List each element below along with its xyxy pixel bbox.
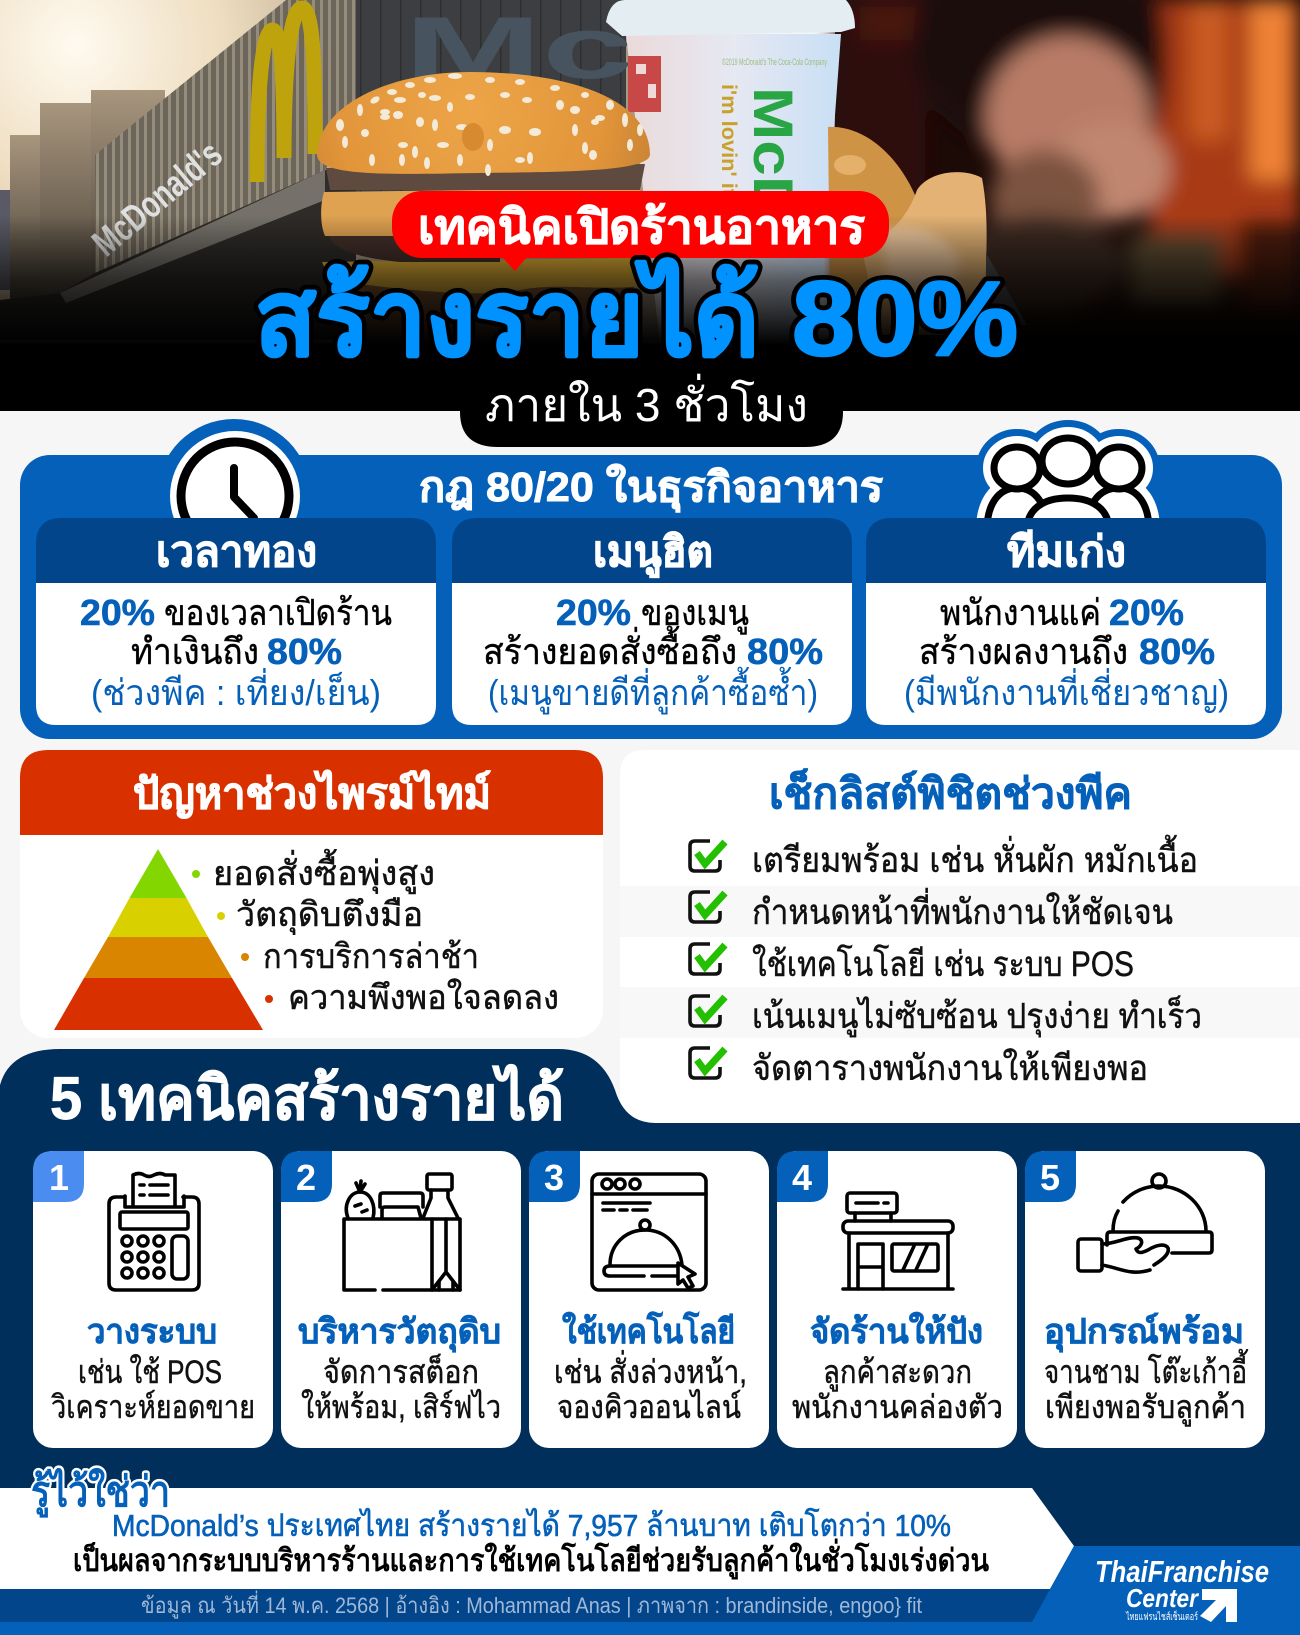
badge 1: 1 <box>49 1157 69 1198</box>
banner shape <box>0 1488 1074 1589</box>
check item 4: เน้นเมนูไม่ซับซ้อน ปรุงง่าย ทำเร็ว <box>752 995 1202 1037</box>
card: golden hours: ของเวลาเปิดร้าน <box>164 592 392 633</box>
photo: fried chicken <box>828 127 1027 335</box>
section: 5 techniques <box>0 1049 1300 1635</box>
card 3 text <box>554 1311 747 1425</box>
check item 1: เตรียมพร้อม เช่น หั่นผัก หมักเนื้อ <box>752 834 1198 880</box>
card 3 text: จองคิวออนไลน์ <box>557 1389 741 1425</box>
tagline bubble <box>392 191 889 271</box>
heading: ปัญหาช่วงไพรม์ไทม์ <box>133 769 491 819</box>
card: strong team: สร้างผลงานถึง <box>919 631 1128 672</box>
check item 5: จัดตารางพนักงานให้เพียงพอ <box>752 1048 1148 1088</box>
card 3 text: ใช้เทคโนโลยี <box>562 1311 735 1351</box>
card: golden hours <box>36 518 436 725</box>
card 5 text <box>1044 1312 1249 1427</box>
pyramid labels <box>192 849 559 1017</box>
main title: สร้างรายได้ <box>255 258 759 378</box>
hero dark fade <box>0 215 1300 345</box>
card: strong team: พนักงานแค่ <box>940 592 1101 633</box>
heading: เช็กลิสต์พิชิตช่วงพีค <box>769 768 1132 817</box>
card 2 text: จัดการสต็อก <box>323 1353 479 1390</box>
check item 3: ใช้เทคโนโลยี เช่น ระบบ POS <box>752 944 1134 984</box>
icon: serving cloche <box>1078 1174 1212 1272</box>
badge 3: 3 <box>544 1157 564 1198</box>
card: strong team <box>866 518 1266 725</box>
card: strong team: ทีมเก่ง <box>1007 528 1126 575</box>
main title <box>255 258 1018 378</box>
icon: clock <box>169 419 300 518</box>
card: hit menu: 80% <box>747 631 823 672</box>
badge 3 <box>529 1151 580 1202</box>
card: strong team: 80% <box>1139 631 1215 672</box>
pyramid chart <box>54 849 263 1030</box>
card 1 text: วิเคราะห์ยอดขาย <box>51 1389 255 1425</box>
logo: ThaiFranchise Center: ไทยแฟรนไชส์เซ็นเตอร์ <box>1125 1609 1198 1623</box>
photo: blurred woman <box>835 0 1300 345</box>
main title: 80% <box>792 260 1018 378</box>
card: strong team: (มีพนักงานที่เชี่ยวชาญ) <box>904 668 1229 713</box>
main title: 80% <box>792 260 1018 378</box>
card 1 text: วางระบบ <box>87 1313 217 1351</box>
logo: ThaiFranchise Center: ThaiFranchise <box>1095 1554 1269 1589</box>
card 2 text: บริหารวัตถุดิบ <box>298 1313 501 1353</box>
card 2 text: ให้พร้อม, เสิร์ฟไว <box>301 1389 501 1425</box>
fact line 1: McDonald’s ประเทศไทย สร้างรายได้ 7,957 ล้านบาท เติบโตกว่า 10% <box>112 1508 951 1543</box>
photo: large Mc wall letters: Mc <box>404 0 634 97</box>
card 1 text: เช่น ใช้ POS <box>78 1354 222 1390</box>
card: golden hours: 20% <box>80 592 155 633</box>
check item 1 <box>690 834 1198 880</box>
subtitle pill <box>460 373 843 447</box>
card: hit menu <box>452 518 852 725</box>
card 5: equipment <box>1025 1151 1265 1448</box>
subtitle pill: ภายใน 3 ชั่วโมง <box>485 373 808 431</box>
panel: prime time problems <box>20 750 603 1038</box>
card 4: shop layout <box>777 1151 1017 1448</box>
card: golden hours: ทำเงินถึง <box>131 631 259 672</box>
pyramid labels: การบริการล่าช้า <box>263 938 479 976</box>
card: hit menu: (เมนูขายดีที่ลูกค้าซื้อซ้ำ) <box>488 666 818 715</box>
card 4 text <box>792 1311 1003 1425</box>
photo: drink cup: i'm lovin' it <box>717 84 740 196</box>
badge 4 <box>777 1151 828 1202</box>
badge 2: 2 <box>296 1157 316 1198</box>
card 3 text: เช่น สั่งล่วงหน้า, <box>554 1350 747 1390</box>
bottom strip <box>0 1622 1300 1635</box>
pyramid labels: วัตถุดิบตึงมือ <box>236 896 423 935</box>
section heading: 5 เทคนิคสร้างรายได้ <box>50 1063 564 1132</box>
fact line 2: เป็นผลจากระบบบริหารร้านและการใช้เทคโนโลยีช่วยรับลูกค้าในชั่วโมงเร่งด่วน <box>73 1538 989 1580</box>
card 1 text <box>51 1313 255 1425</box>
card: hit menu: เมนูฮิต <box>593 528 713 578</box>
card: golden hours: เวลาทอง <box>156 528 317 575</box>
card 5 text: อุปกรณ์พร้อม <box>1044 1312 1244 1353</box>
card 4 text: ลูกค้าสะดวก <box>823 1354 972 1392</box>
photo: building sign: McDonald's <box>85 133 231 265</box>
card 4 text: จัดร้านให้ปัง <box>810 1311 983 1351</box>
tagline bubble: เทคนิคเปิดร้านอาหาร <box>418 200 865 253</box>
icon: POS terminal <box>109 1174 199 1290</box>
hero photo collage <box>0 0 1300 411</box>
check item 2: กำหนดหน้าที่พนักงานให้ชัดเจน <box>752 888 1173 932</box>
panel: 80/20 rule <box>20 419 1282 739</box>
source text: ข้อมูล ณ วันที่ 14 พ.ค. 2568 | อ้างอิง : Mohammad Anas | ภาพจาก : brandinside, engoo} fit <box>141 1590 922 1619</box>
panel: peak-time checklist <box>620 750 1300 1130</box>
card 4 text: พนักงานคล่องตัว <box>792 1389 1003 1425</box>
icon: grocery bag <box>344 1174 460 1290</box>
source strip <box>0 1589 1060 1622</box>
badge 1 <box>33 1151 84 1202</box>
logo: ThaiFranchise Center <box>1032 1546 1300 1635</box>
icon: team <box>987 438 1149 530</box>
card: hit menu: สร้างยอดสั่งซื้อถึง <box>483 625 737 672</box>
badge 2 <box>281 1151 332 1202</box>
card 5 text: เพียงพอรับลูกค้า <box>1045 1389 1246 1427</box>
card 1: system <box>33 1151 273 1448</box>
badge 4: 4 <box>792 1157 812 1198</box>
panel heading: กฎ 80/20 ในธุรกิจอาหาร <box>419 463 883 513</box>
logo: ThaiFranchise Center: Center <box>1126 1583 1200 1613</box>
navy section background <box>0 1049 1300 1635</box>
card 2 text <box>298 1313 501 1425</box>
panel background <box>20 455 1282 739</box>
card: golden hours: (ช่วงพีค : เที่ยง/เย็น) <box>91 668 381 713</box>
logo arrow <box>1200 1589 1237 1622</box>
badge 5: 5 <box>1040 1157 1060 1198</box>
icon: storefront <box>843 1193 953 1289</box>
photo: drink cup <box>606 0 855 345</box>
photo: drink cup: ©2019 McDonald's The Coca-Cola Company <box>722 57 827 67</box>
card 5 text: จานชาม โต๊ะเก้าอี้ <box>1044 1349 1249 1390</box>
pyramid labels: ยอดสั่งซื้อพุ่งสูง <box>213 849 435 894</box>
photo: burger <box>317 72 650 345</box>
card: golden hours: 80% <box>267 631 342 672</box>
card: hit menu: 20% <box>556 592 631 633</box>
card: strong team: 20% <box>1109 592 1184 633</box>
card 2: ingredients <box>281 1151 521 1448</box>
badge 5 <box>1025 1151 1076 1202</box>
photo: drink cup: McD <box>742 87 805 222</box>
footer: did you know <box>0 1467 1300 1635</box>
icon: online booking window <box>592 1174 706 1290</box>
photo: McDonald's building <box>0 0 660 340</box>
pyramid labels: ความพึงพอใจลดลง <box>288 978 559 1017</box>
label: รู้ไว้ใช่ว่า <box>31 1467 170 1518</box>
main title: สร้างรายได้ <box>255 258 759 378</box>
card 3: technology <box>529 1151 769 1448</box>
photo: golden arches <box>257 8 315 182</box>
card: hit menu: ของเมนู <box>641 592 749 635</box>
panel header <box>20 750 603 835</box>
